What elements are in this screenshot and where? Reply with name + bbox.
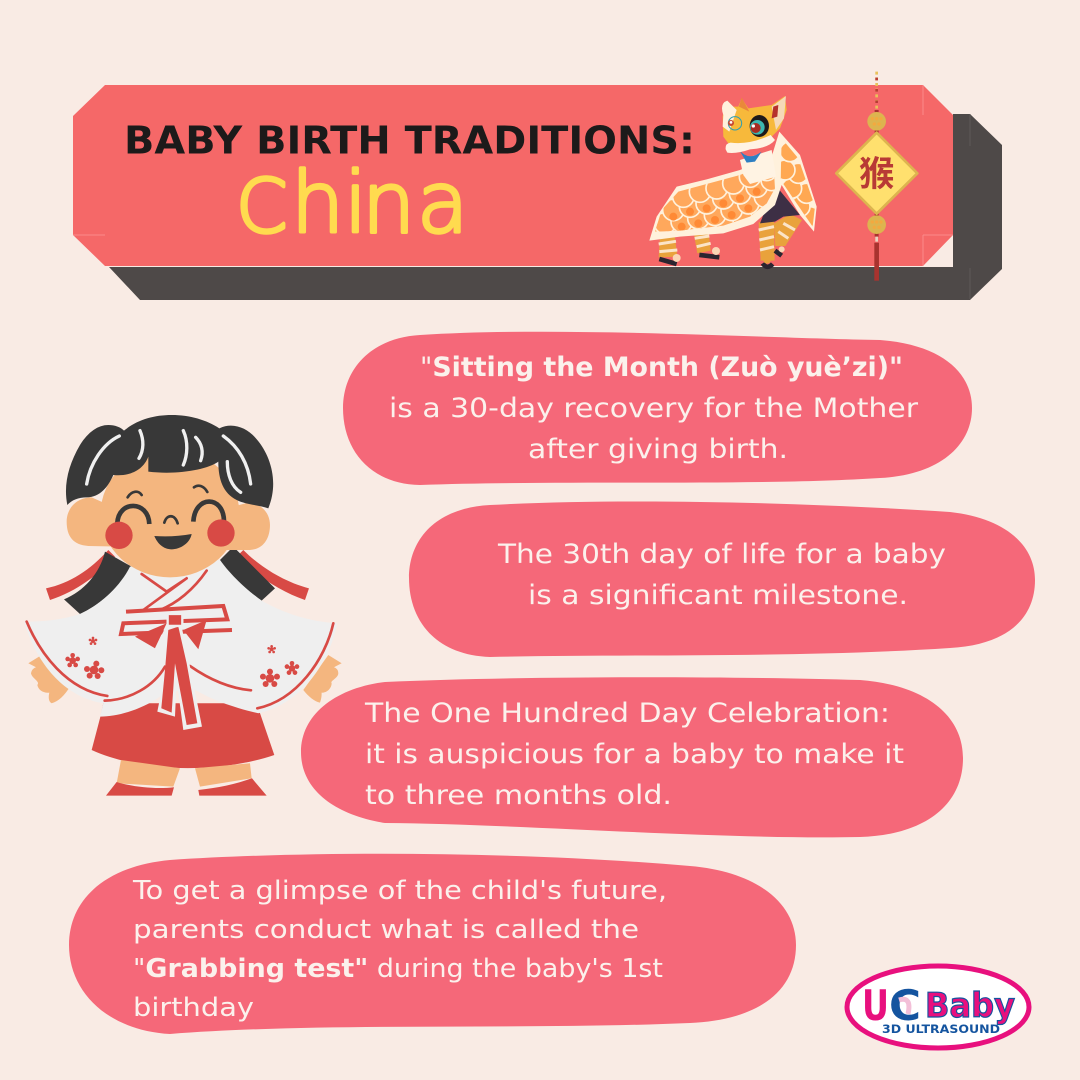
panel: sitting the month: "Sitting the Month (Zuò yuè’zi)": [420, 352, 903, 383]
logo: UC Baby 3D Ultrasound: 3D ULTRASOUND: [882, 1022, 1000, 1036]
panel: one hundred day celebration: [301, 677, 963, 837]
banner ribbon: [73, 85, 1002, 300]
panel: grabbing test: [69, 854, 796, 1034]
panel: one hundred day celebration: The One Hundred Day Celebration:: [364, 698, 890, 729]
logo: UC Baby 3D Ultrasound: C: [889, 981, 921, 1030]
icon: hanging ornament with monkey character: [836, 72, 917, 281]
panel: sitting the month: after giving birth.: [528, 434, 788, 465]
subtitle: China: a: [417, 154, 468, 252]
icon: lion dance costume: [649, 96, 820, 267]
logo: UC Baby 3D Ultrasound: [847, 966, 1029, 1048]
subtitle: China: C: [236, 164, 288, 250]
panel: one hundred day celebration: to three months old.: [365, 780, 672, 811]
panel: thirtieth day: is a significant milestone.: [528, 580, 908, 611]
title: BABY BIRTH TRADITIONS:: [124, 118, 695, 162]
logo: UC Baby 3D Ultrasound: Baby: [925, 986, 1015, 1026]
panel: grabbing test: birthday: [133, 993, 254, 1023]
panel: grabbing test: "Grabbing test" during the baby's 1st: [133, 954, 663, 984]
panel: sitting the month: is a 30-day recovery for the Mother: [389, 393, 918, 424]
panel: thirtieth day: The 30th day of life for a baby: [497, 539, 946, 570]
panel: thirtieth day: [409, 501, 1035, 657]
subtitle: China: h: [291, 154, 344, 252]
panel: one hundred day celebration: it is auspicious for a baby to make it: [365, 739, 904, 770]
icon: hanging ornament with monkey character: 猴: [859, 146, 894, 197]
icon: girl in hanfu: [24, 415, 342, 796]
subtitle: China: i: [344, 154, 367, 252]
panel: grabbing test: parents conduct what is called the: [133, 915, 639, 945]
panel: grabbing test: To get a glimpse of the child's future,: [132, 876, 667, 906]
logo: UC Baby 3D Ultrasound: U: [862, 981, 889, 1030]
subtitle: China: n: [362, 154, 415, 252]
panel: sitting the month: [343, 332, 972, 485]
